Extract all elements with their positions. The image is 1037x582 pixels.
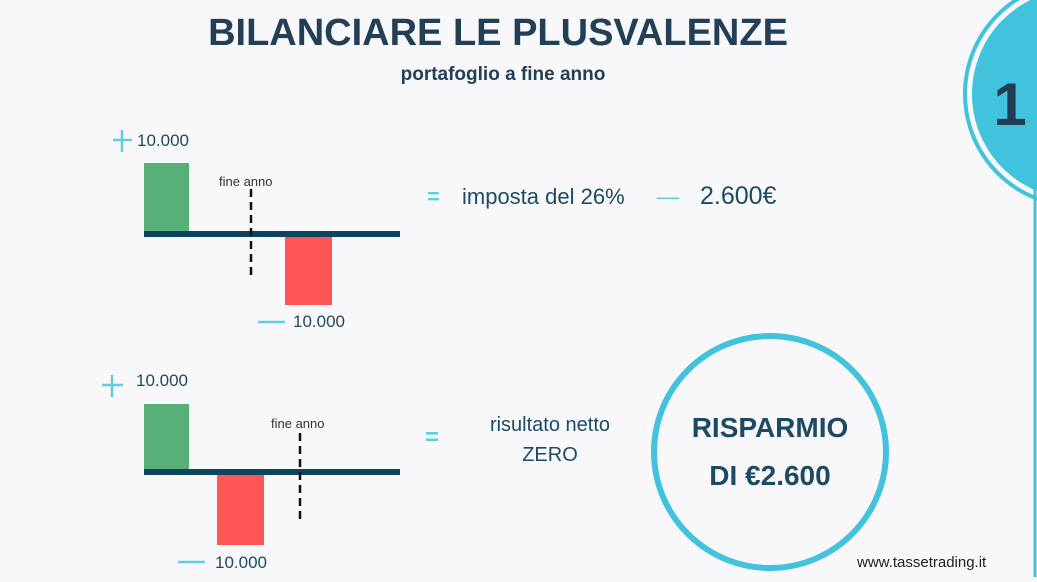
callout: savings circle: DI €2.600: [709, 460, 831, 491]
chart: top scenario: 10.000: [293, 312, 345, 331]
title: BILANCIARE LE PLUSVALENZE: [208, 12, 788, 54]
badge: step number: 1: [993, 71, 1027, 138]
chart: bottom scenario: fine anno: [271, 416, 324, 431]
chart: bottom scenario: [102, 371, 400, 572]
callout: savings circle: [651, 333, 889, 571]
text: net result: risultato netto: [490, 414, 610, 436]
chart: bottom scenario: 10.000: [215, 553, 267, 572]
text: net result: ZERO: [522, 444, 578, 466]
text: net result: [425, 414, 610, 466]
chart: top scenario: 10.000: [137, 131, 189, 150]
footer: website: www.tassetrading.it: [857, 554, 986, 571]
chart: top scenario: [113, 130, 400, 331]
text: tax 26%: 2.600€: [700, 182, 776, 210]
chart: bottom scenario: 10.000: [136, 371, 188, 390]
text: tax 26%: —: [657, 184, 679, 209]
callout: savings circle: RISPARMIO: [692, 412, 848, 443]
text: tax 26%: =: [427, 184, 440, 209]
text: tax 26%: [427, 182, 776, 210]
text: tax 26%: imposta del 26%: [462, 184, 625, 209]
subtitle: portafoglio a fine anno: [401, 64, 605, 85]
text: net result: =: [425, 424, 439, 451]
chart: top scenario: fine anno: [219, 174, 272, 189]
